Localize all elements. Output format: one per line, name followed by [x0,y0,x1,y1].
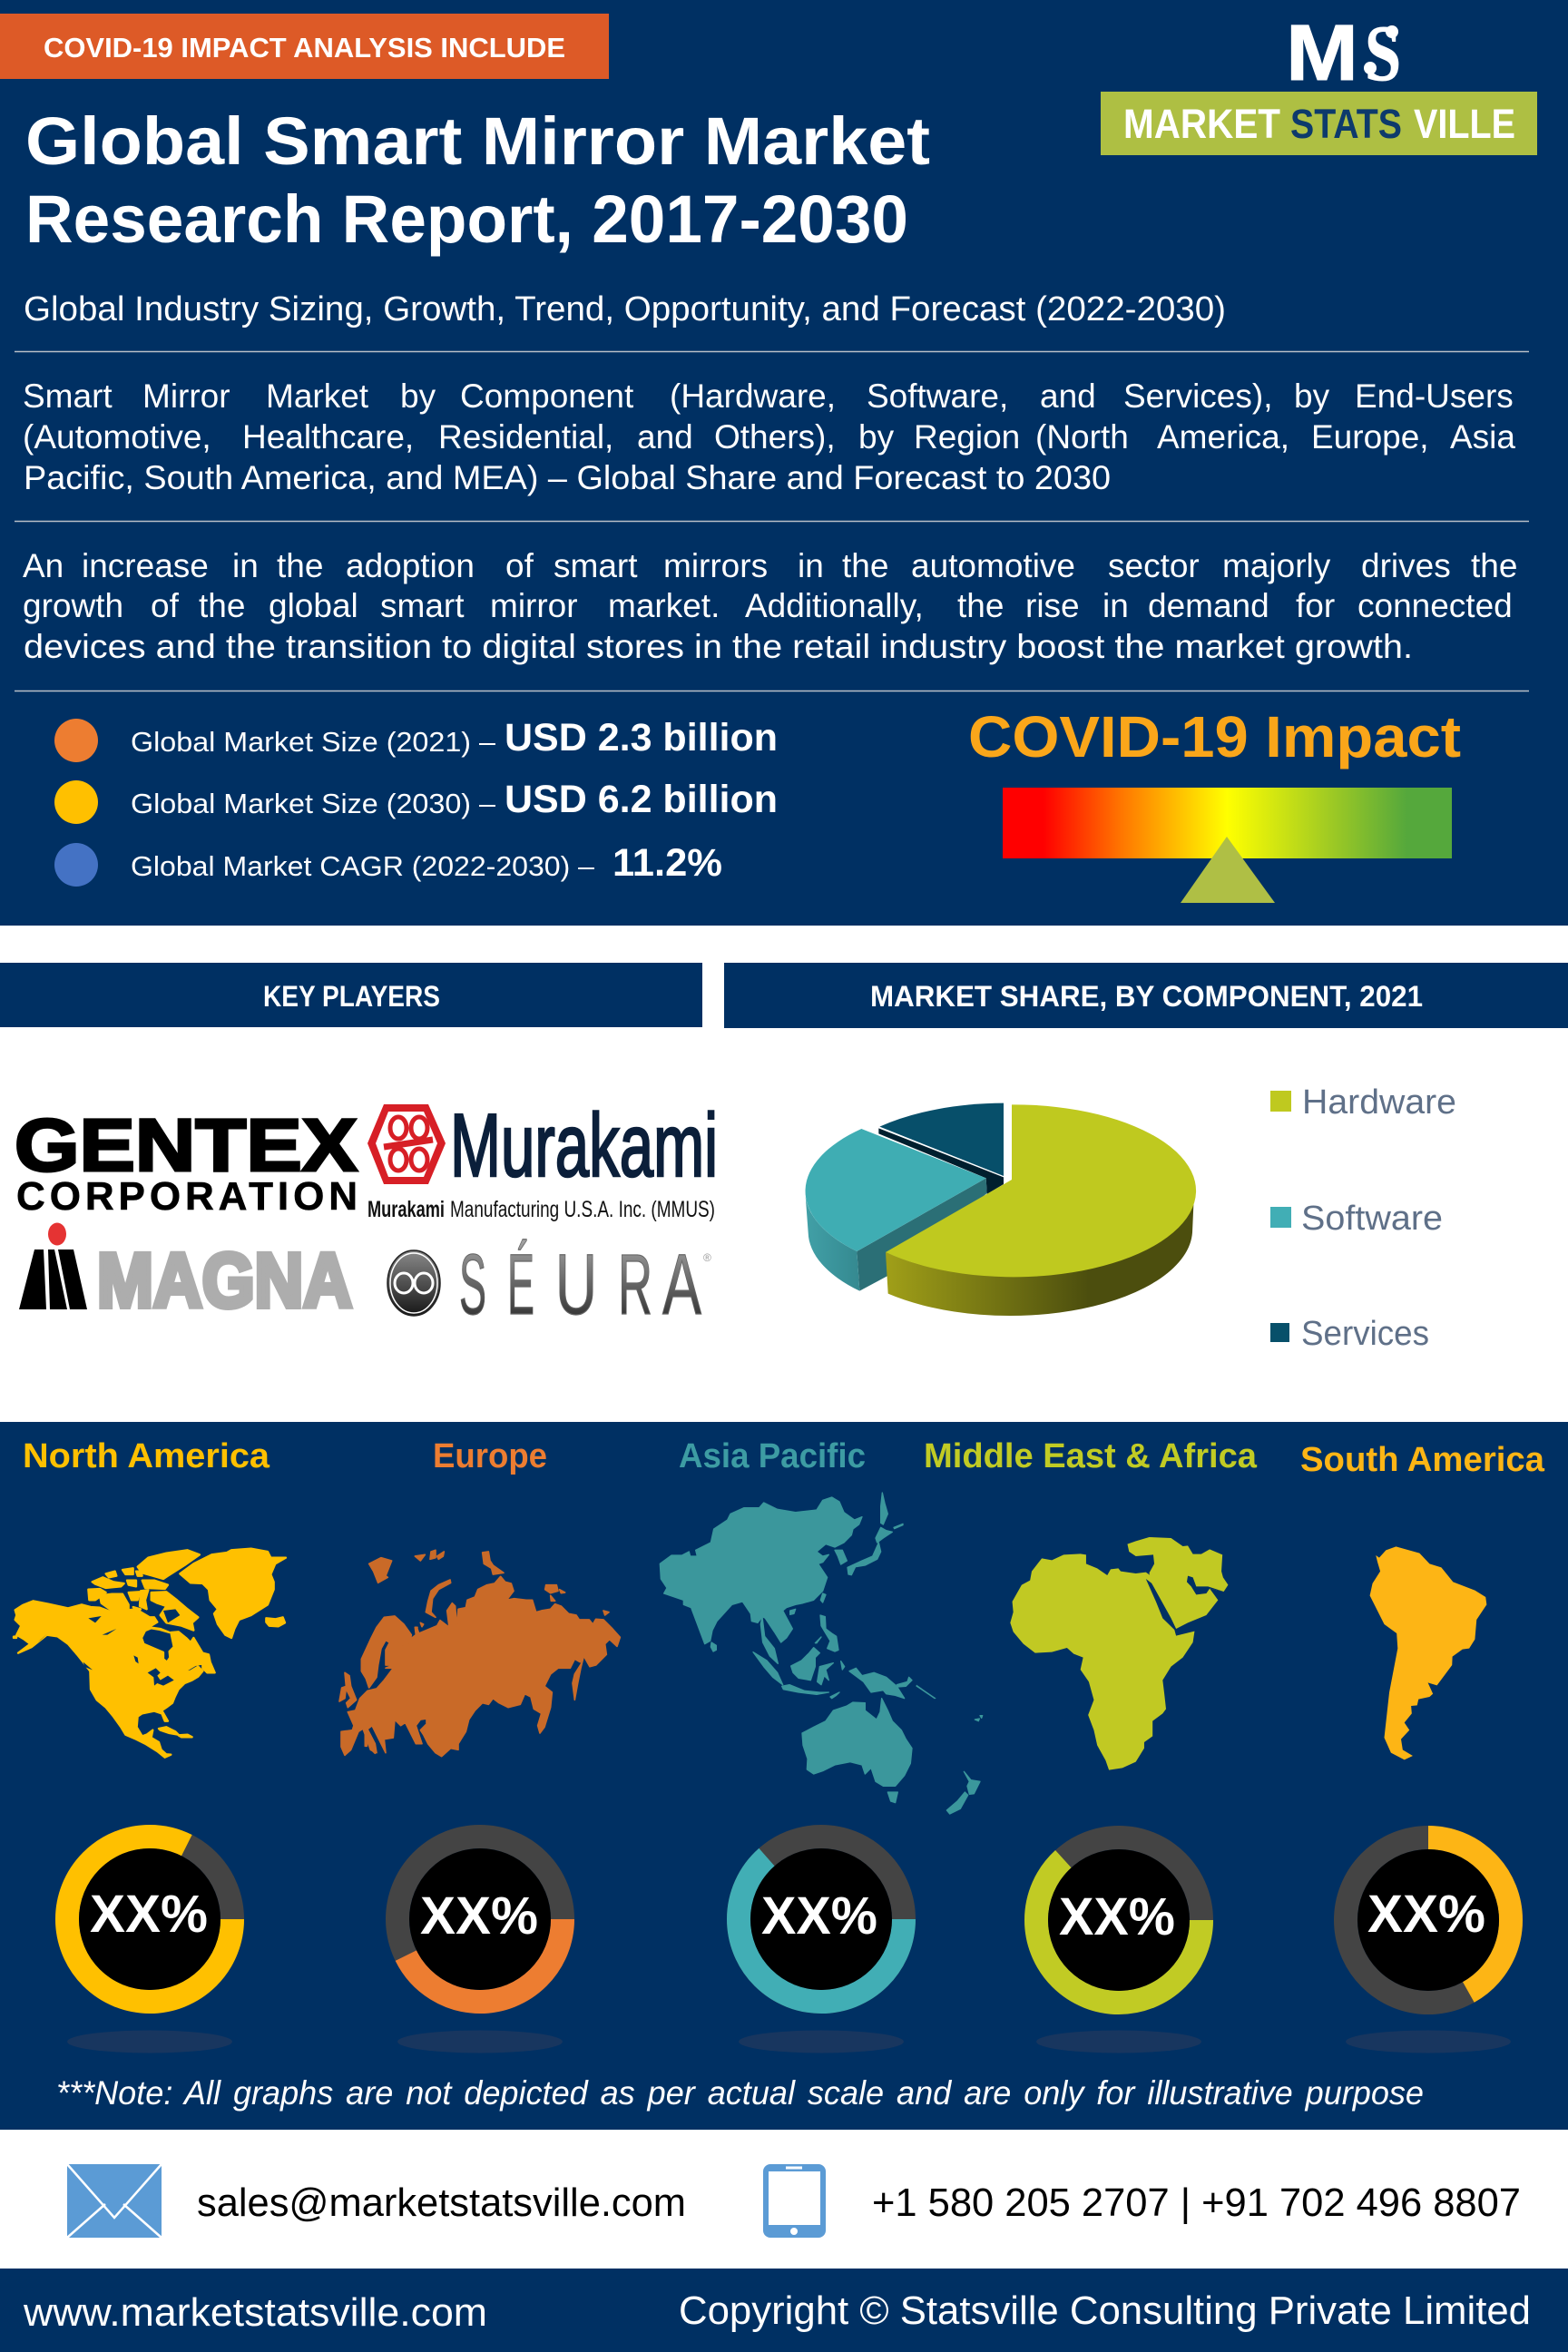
pie slice: services [878,1103,1004,1194]
text block: market drivers: the [277,547,323,584]
text block: market drivers: for [1296,587,1335,624]
text block: market drivers: devices and the transition to digital stores in the retail industry boost the market growth. [24,628,1413,665]
donut shadows [67,2031,1511,2053]
heading: key players: KEY PLAYERS [263,980,440,1013]
map: Asia Pacific [660,1493,983,1814]
key stat: market size 2021 [54,716,778,762]
text block: market segmentation: Mirror [142,377,230,415]
icon: phone [763,2164,826,2238]
text block: market segmentation: by [858,418,895,456]
text block: market segmentation: Region [914,418,1020,456]
logo: Market Stats Ville: S [1365,10,1401,98]
logo: Murakami: Manufacturing U.S.A. Inc. (MMUS) [450,1197,715,1222]
logo: Murakami [368,1095,718,1222]
text block: market drivers: the [957,587,1004,624]
text block: market segmentation: by [400,377,436,415]
text block: market segmentation: (Hardware, [670,377,836,415]
key stat: CAGR: Global Market CAGR (2022-2030) – [131,850,595,882]
map: Europe [339,1550,620,1757]
logo: Seura: A [662,1237,701,1333]
text block: market segmentation: by [1294,377,1330,415]
donut: Europe [397,1837,563,2002]
key stat: market size 2021: Global Market Size (2021) – [131,726,496,758]
logo: Gentex Corporation: GENTEX [15,1104,358,1187]
banner: COVID-19 impact [0,14,609,79]
heading: Europe: Europe [433,1437,547,1475]
logo: Seura: É [507,1237,534,1333]
text block: market drivers: automotive [911,547,1075,584]
text block: market segmentation: Software, [867,377,1008,415]
text block: market segmentation: (North [1035,418,1129,456]
text block: market drivers: in [798,547,824,584]
key stat: CAGR [54,841,722,887]
text block: market segmentation: Smart [23,377,113,415]
logo: Market Stats Ville: M [1286,9,1358,97]
map: Middle East and Africa [1010,1537,1228,1770]
map: South America [1370,1546,1486,1759]
donut: Asia Pacific: XX% [761,1886,877,1945]
text block: market drivers: sector [1108,547,1200,584]
key stat: market size 2030: Global Market Size (2030) – [131,788,496,819]
logo: Seura: U [555,1237,597,1333]
logo: Seura: R [618,1237,652,1333]
heading: Asia Pacific: Asia Pacific [679,1437,866,1475]
map: North America [14,1549,286,1758]
text block: market segmentation: Residential, [438,418,613,456]
donut: Middle East and Africa [1036,1838,1201,2003]
text block: market segmentation: Europe, [1311,418,1429,456]
donut: Europe: XX% [420,1886,538,1945]
panel: header background [0,0,1568,926]
key stat: market size 2030 [54,778,778,824]
text block: market drivers: drives [1361,547,1451,584]
title: Global Smart Mirror Market [25,103,930,179]
key stat: CAGR: 11.2% [612,841,722,885]
text block: market segmentation: Healthcare, [242,418,414,456]
text block: market segmentation: Market [266,377,369,415]
text block: market drivers: adoption [346,547,475,584]
logo: Magna [19,1223,352,1323]
logo: Murakami: Murakami [450,1095,718,1195]
logo: Gentex Corporation [15,1104,358,1219]
logo: Gentex Corporation: CORPORATION [16,1174,358,1219]
text block: market drivers: the [199,587,245,624]
footer: website: www.marketstatsville.com [23,2290,487,2335]
text block: market segmentation: and [1040,377,1096,415]
title: Research Report, 2017-2030 [25,181,908,257]
text block: market segmentation: America, [1157,418,1289,456]
text block: market drivers: demand [1148,587,1269,624]
text block: market drivers: smart [554,547,638,584]
text block: market drivers: majorly [1222,547,1331,584]
key stat: market size 2021: USD 2.3 billion [505,716,778,760]
legend: services: Services [1301,1315,1429,1353]
text block: market drivers: growth [23,587,123,624]
text block: market drivers: in [232,547,259,584]
contact: phone numbers: +1 580 205 2707 | +91 702 496 8807 [872,2180,1521,2225]
logo: Murakami: Murakami [368,1197,445,1222]
text block: market segmentation: Pacific, South America, and MEA) – Global Share and Forecast to 2030 [24,459,1111,496]
text block: market drivers: in [1102,587,1129,624]
pie slice: software [805,1129,987,1291]
panel: footer [0,2269,1568,2352]
logo: Seura: ® [703,1251,711,1264]
donut: South America [1346,1838,1511,2003]
donut: Middle East and Africa: XX% [1059,1887,1175,1946]
text block: market segmentation: Others), [714,418,836,456]
icon: email envelope [67,2164,162,2238]
banner: COVID-19 impact: COVID-19 IMPACT ANALYSIS INCLUDE [44,32,565,64]
text block: market drivers: rise [1025,587,1080,624]
donut: North America: XX% [90,1885,208,1944]
logo: Market Stats Ville: VILLE [1414,101,1515,147]
key stat: market size 2030: USD 6.2 billion [505,778,778,821]
text block: market segmentation: and [637,418,693,456]
legend: software: Software [1301,1200,1443,1238]
logo: Market Stats Ville: MARKET [1123,101,1280,147]
text block: market drivers: of [151,587,180,624]
heading: South America: South America [1300,1441,1545,1479]
text block: market segmentation: Component [460,377,634,415]
heading: market share by component [724,963,1568,1028]
text block: market drivers: An [23,547,64,584]
donut: Asia Pacific [739,1837,904,2002]
footer: copyright: Copyright © Statsville Consulting Private Limited [679,2288,1531,2333]
chart: market share 3D pie [805,1103,1196,1316]
text block: market drivers: connected [1357,587,1513,624]
logo: Market Stats Ville: STATS [1290,101,1402,147]
text block: market drivers: mirrors [663,547,768,584]
text block: market drivers: mirror [490,587,578,624]
pie slice: hardware [886,1104,1196,1316]
text block: market segmentation: End-Users [1355,377,1514,415]
text block: market drivers: smart [380,587,465,624]
text block: market drivers: Additionally, [745,587,924,624]
text block: market drivers: the [1471,547,1517,584]
donut: South America: XX% [1367,1885,1485,1944]
text block: market drivers: market. [608,587,720,624]
heading: COVID-19 impact: COVID-19 Impact [968,704,1461,769]
donut: North America [67,1837,232,2002]
contact: email: sales@marketstatsville.com [197,2180,686,2225]
text block: market segmentation [23,377,1515,496]
text block: market drivers [23,547,1517,665]
legend: hardware: Hardware [1302,1083,1456,1122]
text block: market drivers: the [842,547,888,584]
logo: Seura: S [459,1237,486,1333]
chart: impact gauge [1003,788,1452,903]
logo: Market Stats Ville [1101,9,1537,155]
heading: market share by component: MARKET SHARE, BY COMPONENT, 2021 [870,980,1423,1013]
text block: market segmentation: Services), [1123,377,1272,415]
title [25,103,930,257]
text block: market segmentation: (Automotive, [23,418,211,456]
text block: market segmentation: Asia [1450,418,1515,456]
text block: market drivers: global [269,587,358,624]
logo: Seura [387,1237,711,1333]
panel: regional background [0,1422,1568,2130]
text block: market drivers: increase [82,547,209,584]
note: ***Note: All graphs are not depicted as per actual scale and are only for illustrative purpose [56,2074,1424,2112]
heading: North America: North America [23,1437,270,1475]
heading: Middle East and Africa: Middle East & Africa [924,1437,1258,1475]
logo: Magna: MAGNA [97,1238,352,1323]
heading: key players [0,963,702,1027]
subtitle: Global Industry Sizing, Growth, Trend, Opportunity, and Forecast (2022-2030) [24,290,1226,328]
text block: market drivers: of [505,547,534,584]
